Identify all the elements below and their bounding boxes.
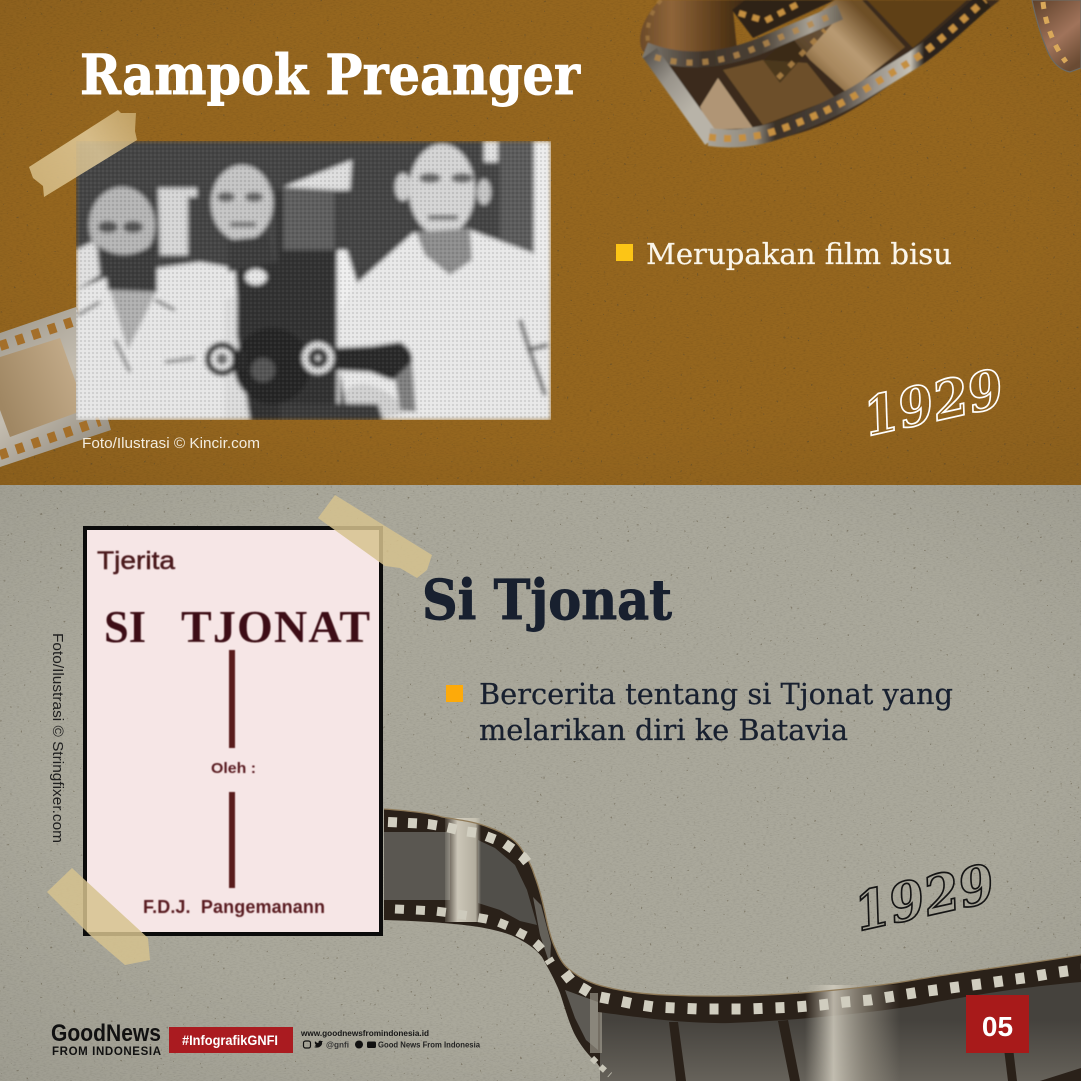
icon: youtube [367, 1042, 376, 1048]
panel background: brown paper [0, 0, 1081, 485]
photo credit: Foto/Ilustrasi © Kincir.com [82, 435, 260, 452]
icon: facebook [355, 1040, 363, 1048]
footer contact details [300, 1028, 480, 1050]
film roll illustration, top right [640, 0, 1000, 146]
poster text: author: F.D.J. Pangemanann [143, 897, 325, 917]
film strip illustration, winding bottom right [384, 809, 1081, 1081]
page number badge [966, 995, 1029, 1053]
hashtag badge [169, 1027, 293, 1053]
poster text: TJONAT: TJONAT [181, 601, 370, 652]
icon: instagram [304, 1041, 310, 1048]
title: Rampok Preanger [80, 42, 581, 107]
footer brand logo: GoodNews [51, 1020, 161, 1047]
handle text: @gnfi [326, 1040, 349, 1050]
tape on photo [29, 110, 137, 197]
page name text: Good News From Indonesia [378, 1040, 480, 1050]
year stamp 1929: 1929 [848, 852, 1000, 944]
bullet point with description: Bercerita tentang si Tjonat yang [479, 677, 953, 711]
film strip fragment, top right corner [1032, 0, 1081, 72]
poster: Si Tjonat cover [85, 528, 381, 934]
footer brand logo: FROM INDONESIA [52, 1046, 161, 1058]
tape top of poster [318, 495, 432, 578]
bullet point with description [446, 677, 953, 747]
hashtag badge: #InfografikGNFI [182, 1032, 278, 1048]
bullet point with description: melarikan diri ke Batavia [479, 713, 848, 747]
poster text: Oleh: Oleh : [211, 760, 256, 777]
poster rule upper [229, 650, 235, 748]
poster rule lower [229, 792, 235, 888]
icon: twitter [314, 1041, 323, 1048]
panel: Rampok Preanger section [0, 0, 1081, 485]
poster text: Tjerita: Tjerita [97, 547, 175, 575]
panel background: grey paper [0, 485, 1081, 1081]
panel: Si Tjonat section [0, 485, 1081, 1081]
photo: three men with a film camera [76, 141, 551, 420]
page number badge: 05 [982, 1011, 1013, 1042]
film strip fragment behind photo [0, 307, 111, 467]
year stamp 1929: 1929 [857, 357, 1009, 449]
poster text: SI: SI [104, 601, 146, 652]
heading: Si Tjonat: Si Tjonat [422, 567, 673, 632]
tape bottom of poster [47, 868, 150, 965]
poster credit, vertical: Foto/Ilustrasi © Stringfixer.com [49, 633, 65, 843]
bullet point: Merupakan film bisu [646, 237, 952, 271]
footer brand logo [51, 1020, 161, 1058]
footer contact details: www.goodnewsfromindonesia.id [300, 1028, 429, 1038]
